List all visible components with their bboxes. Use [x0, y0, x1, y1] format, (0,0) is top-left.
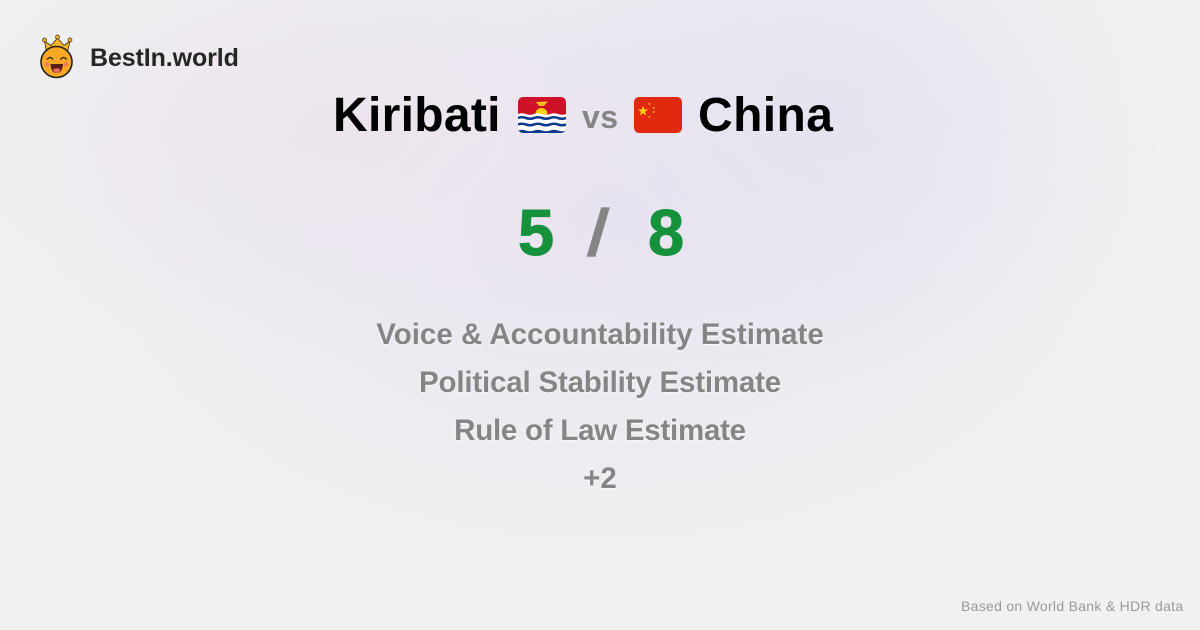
flag: China [634, 97, 682, 133]
icon: crowned smiley face [40, 34, 73, 78]
score: Kiribati: 5 [518, 196, 554, 269]
indicator: voice and accountability: Voice & Accountability Estimate [376, 318, 824, 351]
indicator: rule of law: Rule of Law Estimate [454, 414, 746, 447]
indicator: political stability: Political Stability Estimate [419, 366, 781, 399]
logo: crowned smiley and brand name [40, 34, 239, 78]
country name: China: China [698, 89, 833, 142]
brand name: BestIn.world [90, 44, 239, 72]
title: country comparison [333, 89, 834, 142]
flag: Kiribati [518, 97, 566, 133]
indicator: two more: +2 [583, 462, 617, 495]
score separator: / [585, 196, 611, 269]
vs label: vs [582, 99, 618, 135]
list of indicators [376, 318, 824, 495]
score: China: 8 [648, 196, 684, 269]
score: 5 / 8 [518, 196, 684, 269]
country name: Kiribati: Kiribati [333, 89, 501, 142]
data source note: Based on World Bank & HDR data [961, 598, 1183, 614]
